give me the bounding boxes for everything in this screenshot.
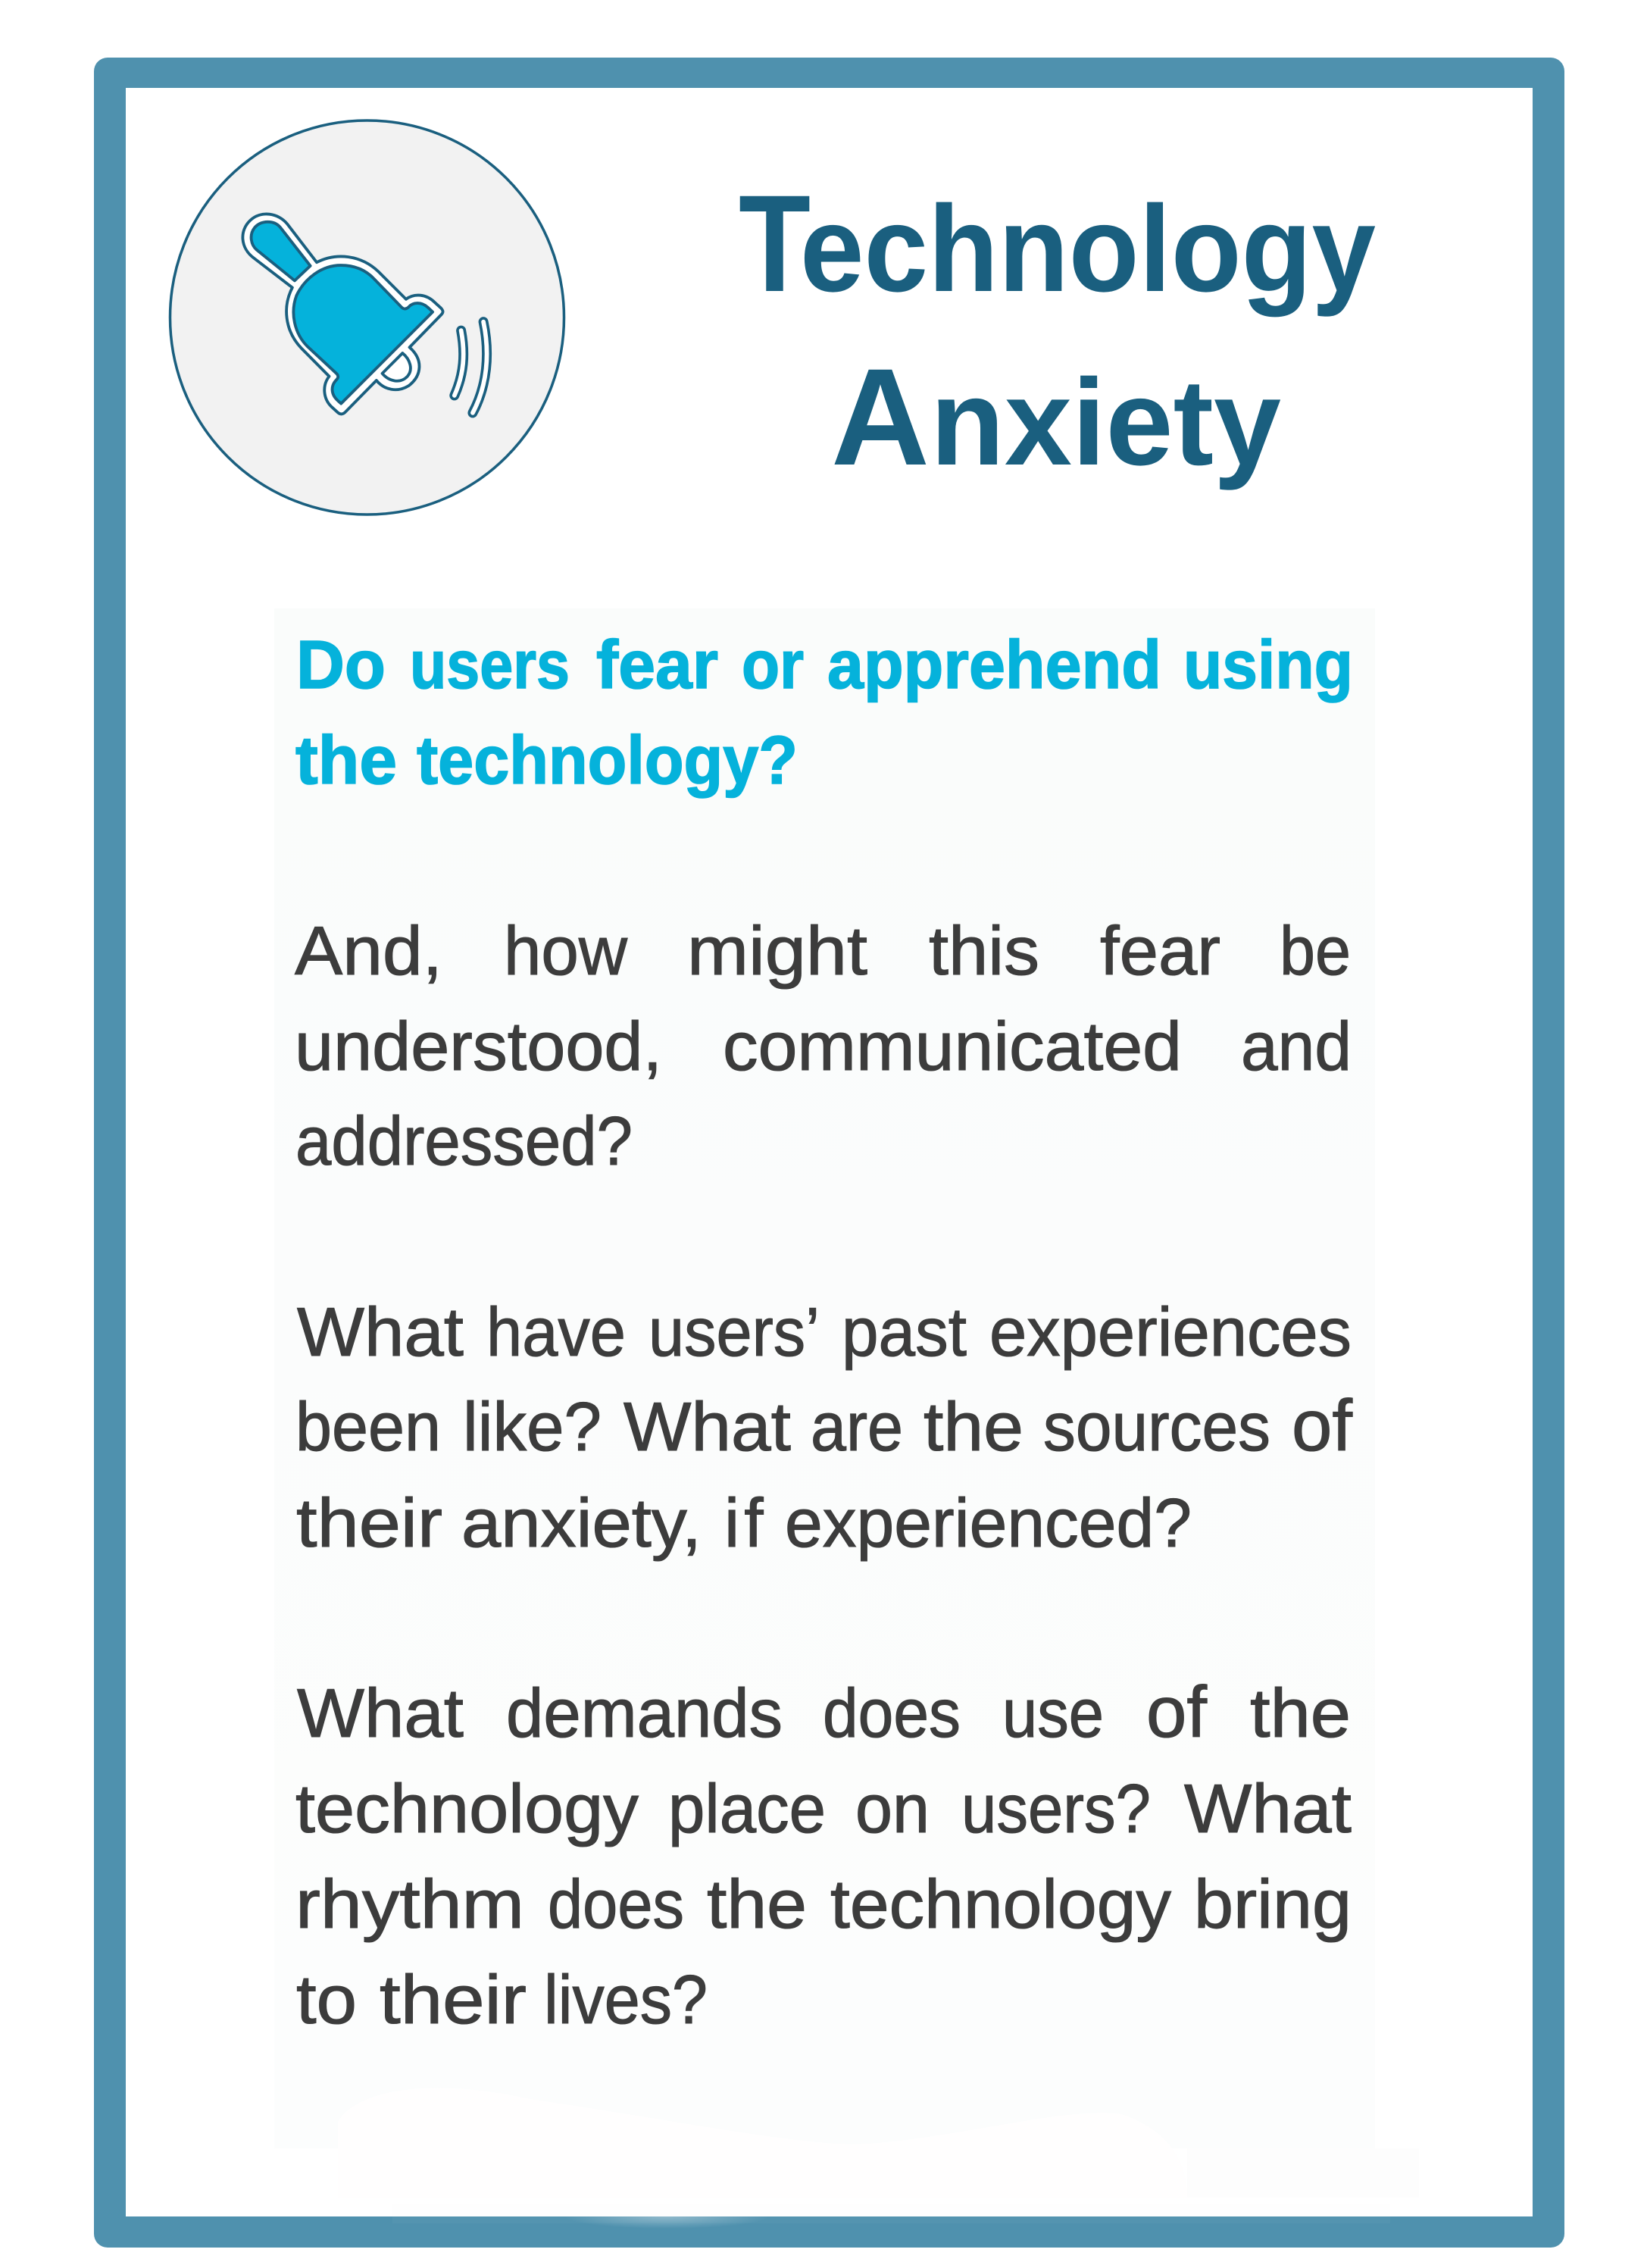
paragraph 2: if [724,1485,768,1562]
paragraph 1: this [929,913,1039,990]
title: nxiety [930,354,1281,491]
question heading: users [410,627,570,703]
panel: text background [274,608,1419,2229]
paragraph 1: fear [1100,913,1220,990]
paragraph 1: be [1280,913,1351,990]
paragraph 3: demands [506,1675,783,1752]
paragraph 3: use [1002,1675,1104,1752]
question heading [295,627,1353,799]
paragraph 3: What [297,1675,464,1752]
paragraph 2: their [296,1485,442,1562]
paragraph 2: the [924,1389,1024,1466]
paragraph 2: sources [1043,1389,1270,1466]
paragraph 3: What [1184,1771,1352,1847]
paragraph 2 [295,1294,1352,1562]
paragraph 3: their [380,1962,527,2038]
title: echnology [800,180,1376,318]
paragraph 3: the [1250,1675,1351,1752]
paragraph 1: might [687,913,867,990]
paragraph 2: like? [463,1389,602,1466]
title: A [831,339,930,494]
question heading: apprehend [827,627,1161,703]
paragraph 1: And, [295,913,442,990]
paragraph 1: and [1241,1009,1352,1085]
paragraph 3: does [823,1675,961,1752]
paragraph 3: place [668,1771,826,1847]
paragraph 2: past [842,1294,967,1371]
question heading: using [1183,627,1353,703]
paragraph 3: does [548,1866,684,1943]
paragraph 3: bring [1194,1866,1352,1943]
paragraph 2: What [623,1389,791,1466]
paragraph 3: on [855,1771,930,1847]
question heading: or [742,627,804,703]
paragraph 2: users’ [648,1294,820,1371]
title: T [739,166,811,321]
paragraph 1: communicated [723,1009,1182,1085]
title [739,166,1376,494]
paragraph 2: What [297,1294,464,1371]
paragraph 2: been [295,1389,441,1466]
question heading: technology? [417,723,798,799]
paragraph 3: to [296,1962,357,2038]
paragraph 3: rhythm [295,1866,524,1943]
paragraph 2: anxiety, [461,1485,702,1562]
paragraph 3 [295,1672,1352,2038]
paragraph 2: experiences [989,1294,1352,1371]
paragraph 1: understood, [295,1009,662,1085]
paragraph 3: technology [295,1771,639,1847]
paragraph 1: how [504,913,627,990]
icon: ringing bell in circle [170,120,564,515]
paragraph 3: of [1146,1672,1207,1753]
paragraph 2: are [811,1389,903,1466]
paragraph 2: experienced? [785,1485,1192,1562]
question heading: the [295,723,397,799]
paragraph 3: the [707,1866,807,1943]
paragraph 2: of [1292,1385,1352,1466]
question heading: fear [596,627,718,703]
paragraph 1 [295,913,1352,1180]
paragraph 1: addressed? [295,1103,633,1180]
paragraph 2: have [486,1294,626,1371]
question heading: Do [296,627,386,703]
paragraph 3: lives? [544,1962,708,2038]
paragraph 3: users? [961,1771,1151,1847]
paragraph 3: technology [830,1866,1171,1943]
